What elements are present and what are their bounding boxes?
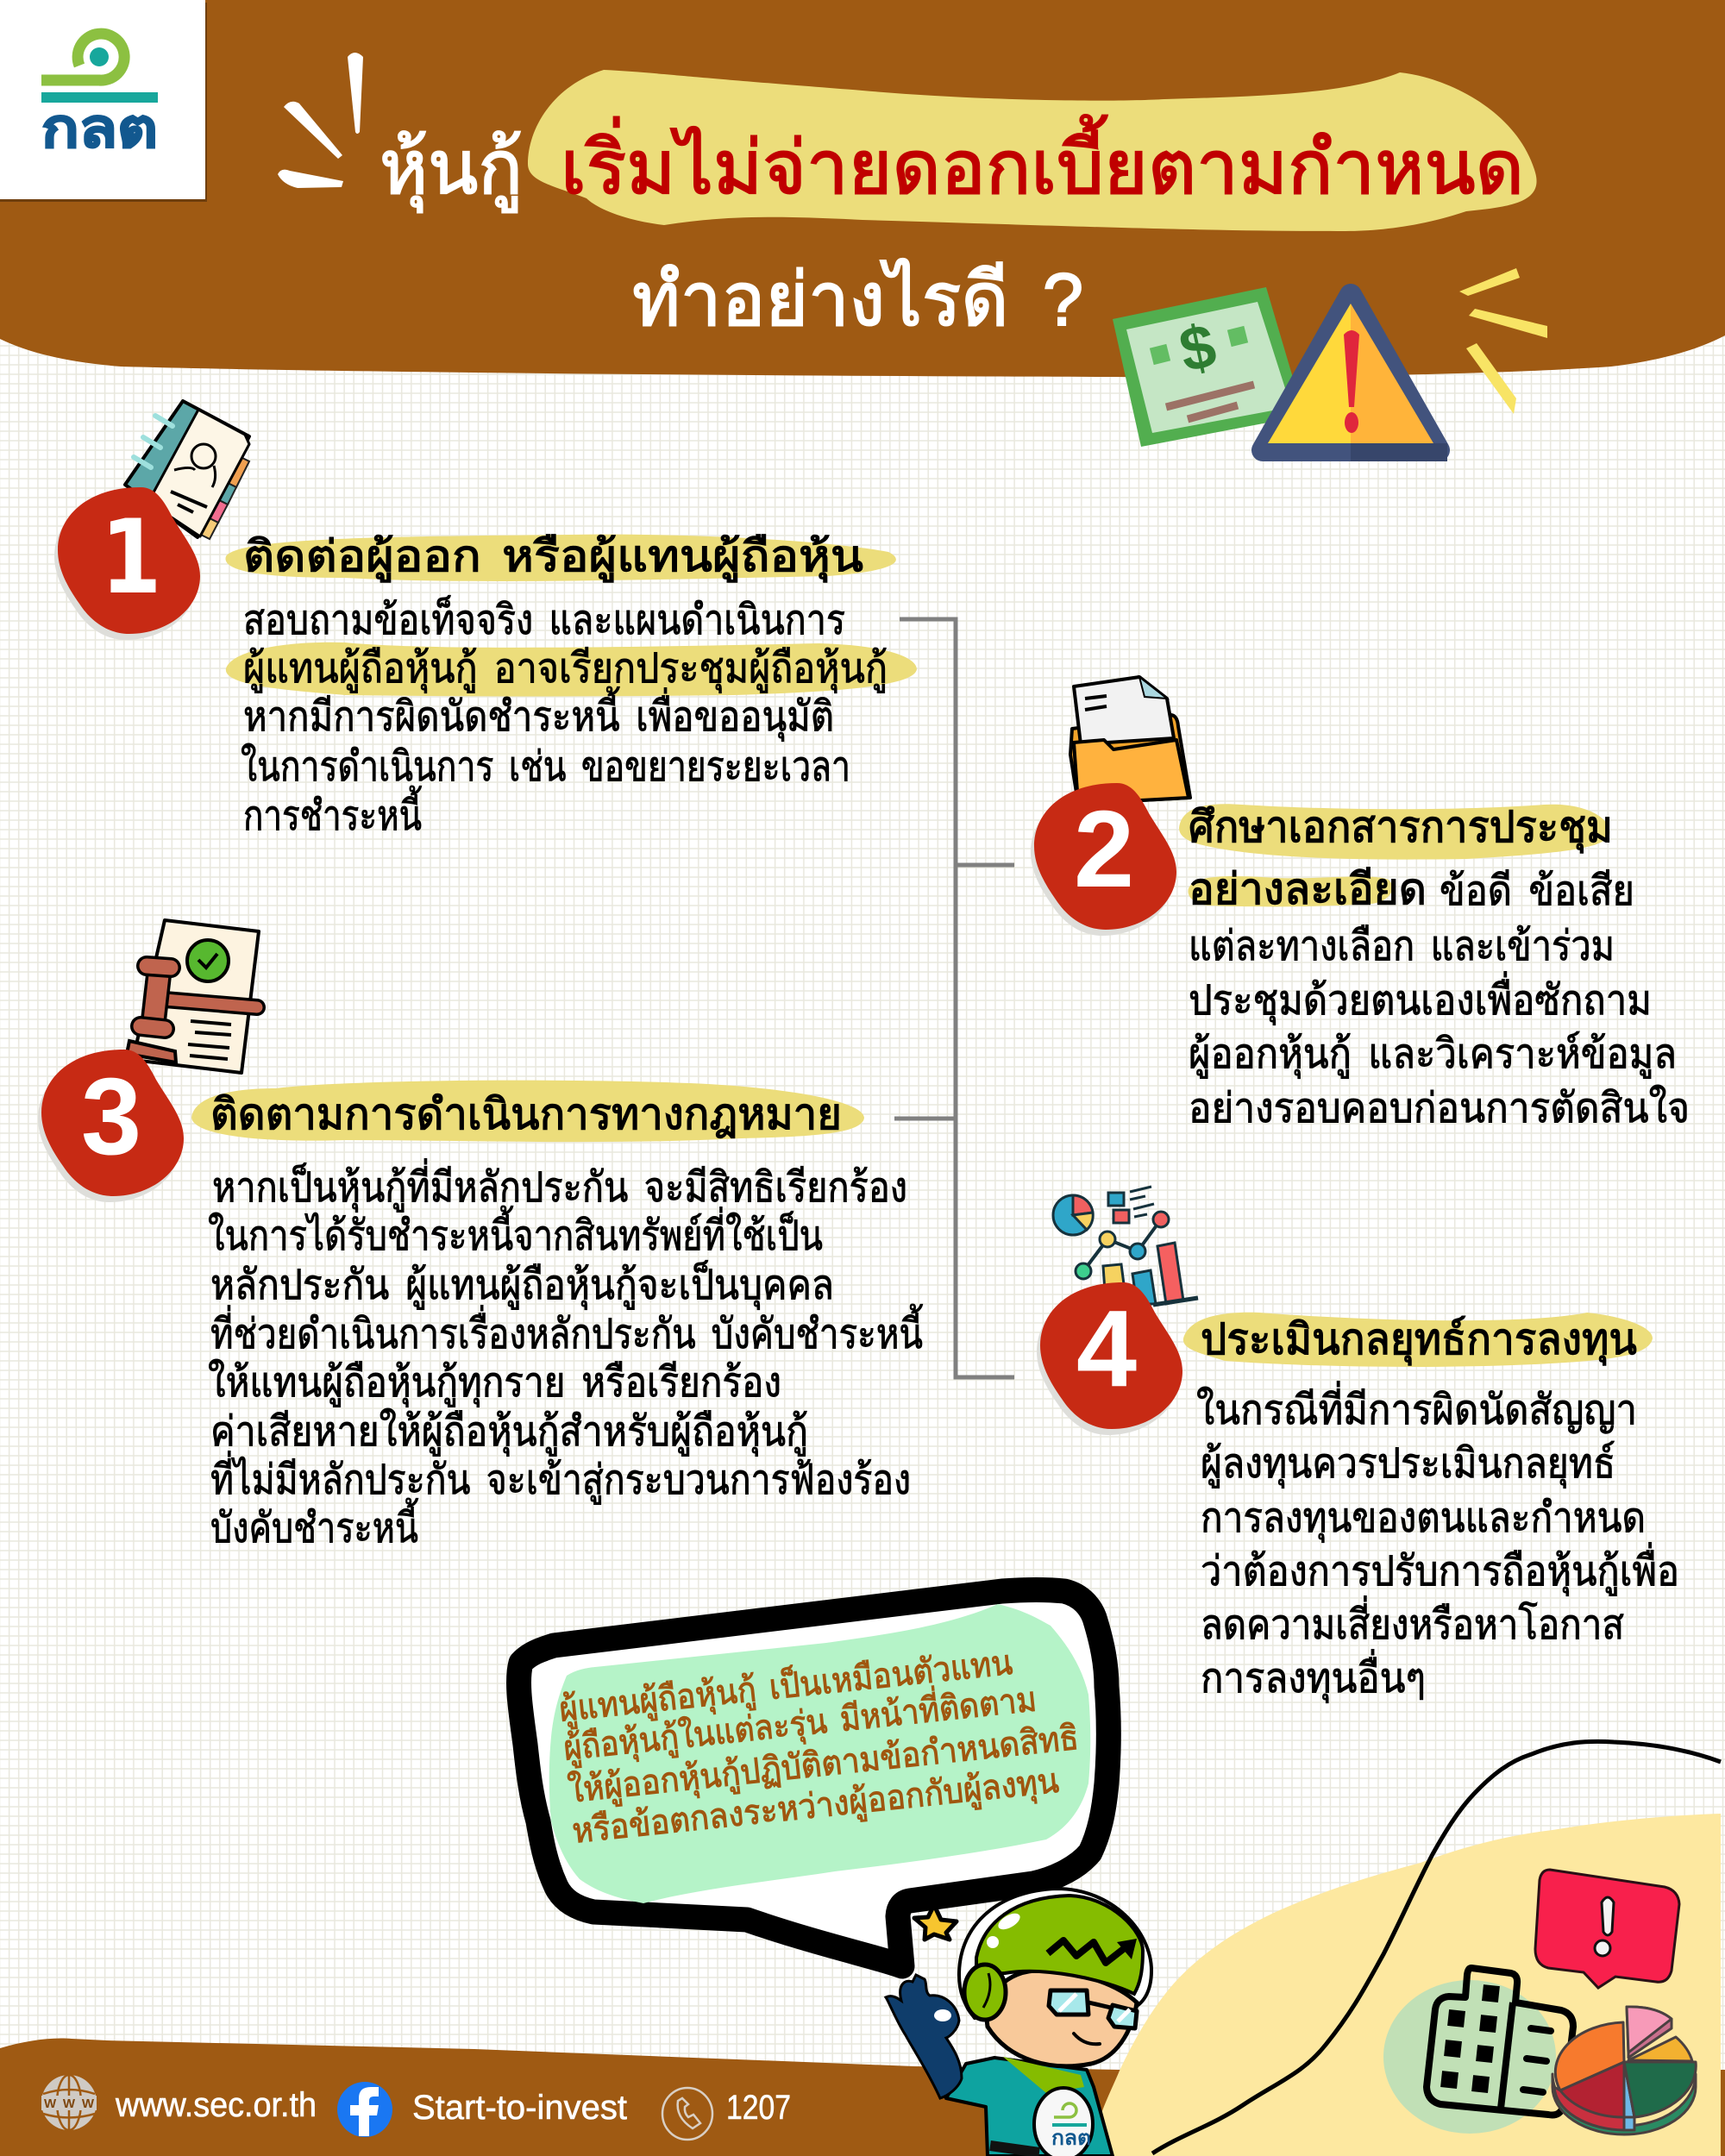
footer: website: www.sec.or.th	[115, 2086, 317, 2124]
title sparkle strokes	[278, 53, 363, 188]
number badge 2: 2	[1074, 788, 1134, 910]
text block	[1189, 868, 1690, 1131]
belt	[990, 2146, 1039, 2153]
collar	[1003, 2057, 1084, 2093]
logo panel	[0, 0, 207, 202]
heading: ติดต่อผู้ออก หรือผู้แทนผู้ถือหุ้น	[243, 532, 863, 582]
text block: ว่าต้องการปรับการถือหุ้นกู้เพื่อ	[1201, 1542, 1679, 1596]
icon: office building	[1383, 1968, 1573, 2134]
number badge 1: 1	[100, 498, 162, 617]
callout text: หรือข้อตกลงระหว่างผู้ออกกับผู้ลงทุน	[570, 1762, 1061, 1852]
footer: phone	[662, 2088, 791, 2140]
text block: ที่ไม่มีหลักประกัน จะเข้าสู่กระบวนการฟ้องร้อง	[210, 1451, 911, 1505]
footer: phone: 1207	[726, 2089, 791, 2127]
text block	[226, 595, 917, 839]
heading: ประเมินกลยุทธ์การลงทุน	[1201, 1315, 1637, 1365]
face	[987, 1971, 1137, 2066]
footer: facebook: Start-to-invest	[412, 2089, 627, 2127]
heading: ติดตามการดำเนินการทางกฎหมาย	[210, 1090, 842, 1138]
heading highlight line 2	[1188, 876, 1392, 906]
text block: ในการดำเนินการ เช่น ขอขยายระยะเวลา	[241, 743, 850, 790]
icon: phone	[662, 2088, 712, 2140]
text block: ค่าเสียหายให้ผู้ถือหุ้นกู้สำหรับผู้ถือหุ้นกู้	[210, 1407, 808, 1457]
callout text	[557, 1641, 1081, 1852]
text block	[1196, 1381, 1679, 1703]
text block: บังคับชำระหนี้	[210, 1498, 418, 1551]
speech bubble	[518, 1590, 1108, 1966]
panel: step 1	[54, 401, 917, 839]
footer: website	[41, 2075, 317, 2130]
connector lines	[894, 619, 1014, 1377]
title line 2: ทำอย่างไรดี ?	[632, 259, 1083, 342]
footer: facebook	[337, 2082, 627, 2137]
heading: ศึกษาเอกสารการประชุม	[1189, 803, 1613, 853]
number badge 1	[54, 487, 200, 640]
text block: การลงทุนของตนและกำหนด	[1201, 1495, 1646, 1543]
icon: document folder	[1070, 677, 1190, 804]
ear cup detail	[983, 1973, 990, 2008]
badge wordmark: กลต	[1051, 2127, 1091, 2150]
text block: การลงทุนอื่นๆ	[1201, 1649, 1426, 1703]
helmet arrow	[1048, 1940, 1126, 1963]
star	[914, 1905, 957, 1940]
icon: gavel and document	[127, 920, 259, 1073]
callout text: ผู้ถือหุ้นกู้ในแต่ละรุ่น มีหน้าที่ติดตาม	[561, 1676, 1038, 1770]
yellow corner shape	[1099, 1814, 1721, 2156]
icon: money bill: $	[1174, 311, 1222, 385]
text block: สอบถามข้อเท็จจริง และแผนดำเนินการ	[243, 595, 845, 643]
helmet bubble	[959, 1889, 1151, 2018]
badge	[1034, 2088, 1093, 2156]
header band	[0, 0, 1725, 377]
icon: contact notebook	[125, 401, 249, 539]
text block: ในการได้รับชำระหนี้จากสินทรัพย์ที่ใช้เป็น	[208, 1206, 823, 1259]
number badge 4	[1037, 1282, 1182, 1435]
icon: warning triangle	[1263, 295, 1447, 461]
title highlight blob	[528, 70, 1537, 231]
number badge 4: 4	[1076, 1288, 1137, 1409]
icon: alert rays	[1459, 268, 1547, 414]
mascot character	[886, 1889, 1151, 2156]
badge emblem	[1052, 2103, 1087, 2127]
text block: อย่างรอบคอบก่อนการตัดสินใจ	[1189, 1084, 1690, 1131]
heading	[1189, 803, 1613, 913]
panel: step 4	[1037, 1187, 1679, 1703]
text block: ผู้ออกหุ้นกู้ และวิเคราะห์ข้อมูล	[1189, 1031, 1677, 1079]
text block: หากเป็นหุ้นกู้ที่มีหลักประกัน จะมีสิทธิเรียกร้อง	[212, 1158, 907, 1213]
text block: ที่ช่วยดำเนินการเรื่องหลักประกัน บังคับชำระหนี้	[210, 1304, 923, 1357]
heading highlight	[1183, 1313, 1653, 1367]
text block: ให้แทนผู้ถือหุ้นกู้ทุกราย หรือเรียกร้อง	[208, 1358, 781, 1407]
number badge 3: 3	[81, 1056, 141, 1177]
text block: ข้อดี ข้อเสีย	[1440, 868, 1634, 914]
curved line	[1152, 1741, 1721, 2153]
helmet dome	[976, 1896, 1143, 1994]
arrow head	[1117, 1939, 1137, 1959]
hand and arm	[886, 1975, 962, 2098]
body	[946, 2058, 1113, 2156]
footer band	[0, 2038, 1725, 2156]
glasses	[1049, 1990, 1137, 2028]
text block: ผู้แทนผู้ถือหุ้นกู้ อาจเรียกประชุมผู้ถือหุ้นกู้	[243, 646, 888, 693]
text block	[208, 1158, 923, 1551]
icon: pie chart	[1552, 2007, 1696, 2134]
heading highlight	[191, 1081, 864, 1142]
text block: ประชุมด้วยตนเองเพื่อซักถาม	[1189, 971, 1652, 1025]
panel: step 3	[38, 920, 923, 1551]
icon: charts	[1053, 1187, 1198, 1305]
text block: ลดความเสี่ยงหรือหาโอกาส	[1201, 1595, 1624, 1648]
ok-sign gap	[934, 2009, 951, 2021]
logo wordmark: กลต	[41, 99, 158, 159]
helmet shine	[987, 1910, 1023, 1948]
text block: หากมีการผิดนัดชำระหนี้ เพื่อขออนุมัติ	[243, 686, 834, 742]
title line 1: เริ่มไม่จ่ายดอกเบี้ยตามกำหนด	[561, 115, 1524, 210]
icon: globe	[41, 2075, 97, 2130]
number badge 2	[1031, 783, 1176, 936]
smile	[1074, 2034, 1100, 2044]
icon: money bill	[1113, 287, 1304, 447]
icon: facebook	[337, 2082, 392, 2137]
title line 1: หุ้นกู้	[380, 127, 523, 213]
callout text: ผู้แทนผู้ถือหุ้นกู้ เป็นเหมือนตัวแทน	[557, 1641, 1014, 1731]
heading highlight	[1179, 804, 1609, 860]
number badge 3	[38, 1050, 184, 1202]
text block: แต่ละทางเลือก และเข้าร่วม	[1189, 924, 1615, 969]
heading highlight	[225, 535, 896, 581]
icon: globe: WWW	[44, 2096, 95, 2111]
mint panel	[549, 1604, 1090, 1903]
text block: ผู้ลงทุนควรประเมินกลยุทธ์	[1201, 1441, 1615, 1489]
text block: ในกรณีที่มีการผิดนัดสัญญา	[1196, 1381, 1637, 1433]
panel: step 2	[1031, 677, 1690, 1131]
text block: หลักประกัน ผู้แทนผู้ถือหุ้นกู้จะเป็นบุคคล	[210, 1260, 834, 1310]
heading: อย่างละเอียด	[1189, 865, 1427, 913]
icon: alert speech badge	[1535, 1870, 1679, 1988]
logo emblem	[41, 34, 158, 103]
callout text: ให้ผู้ออกหุ้นกู้ปฏิบัติตามข้อกำหนดสิทธิ	[566, 1717, 1081, 1812]
ear cup	[964, 1965, 1006, 2020]
text block: การชำระหนี้	[243, 786, 422, 839]
